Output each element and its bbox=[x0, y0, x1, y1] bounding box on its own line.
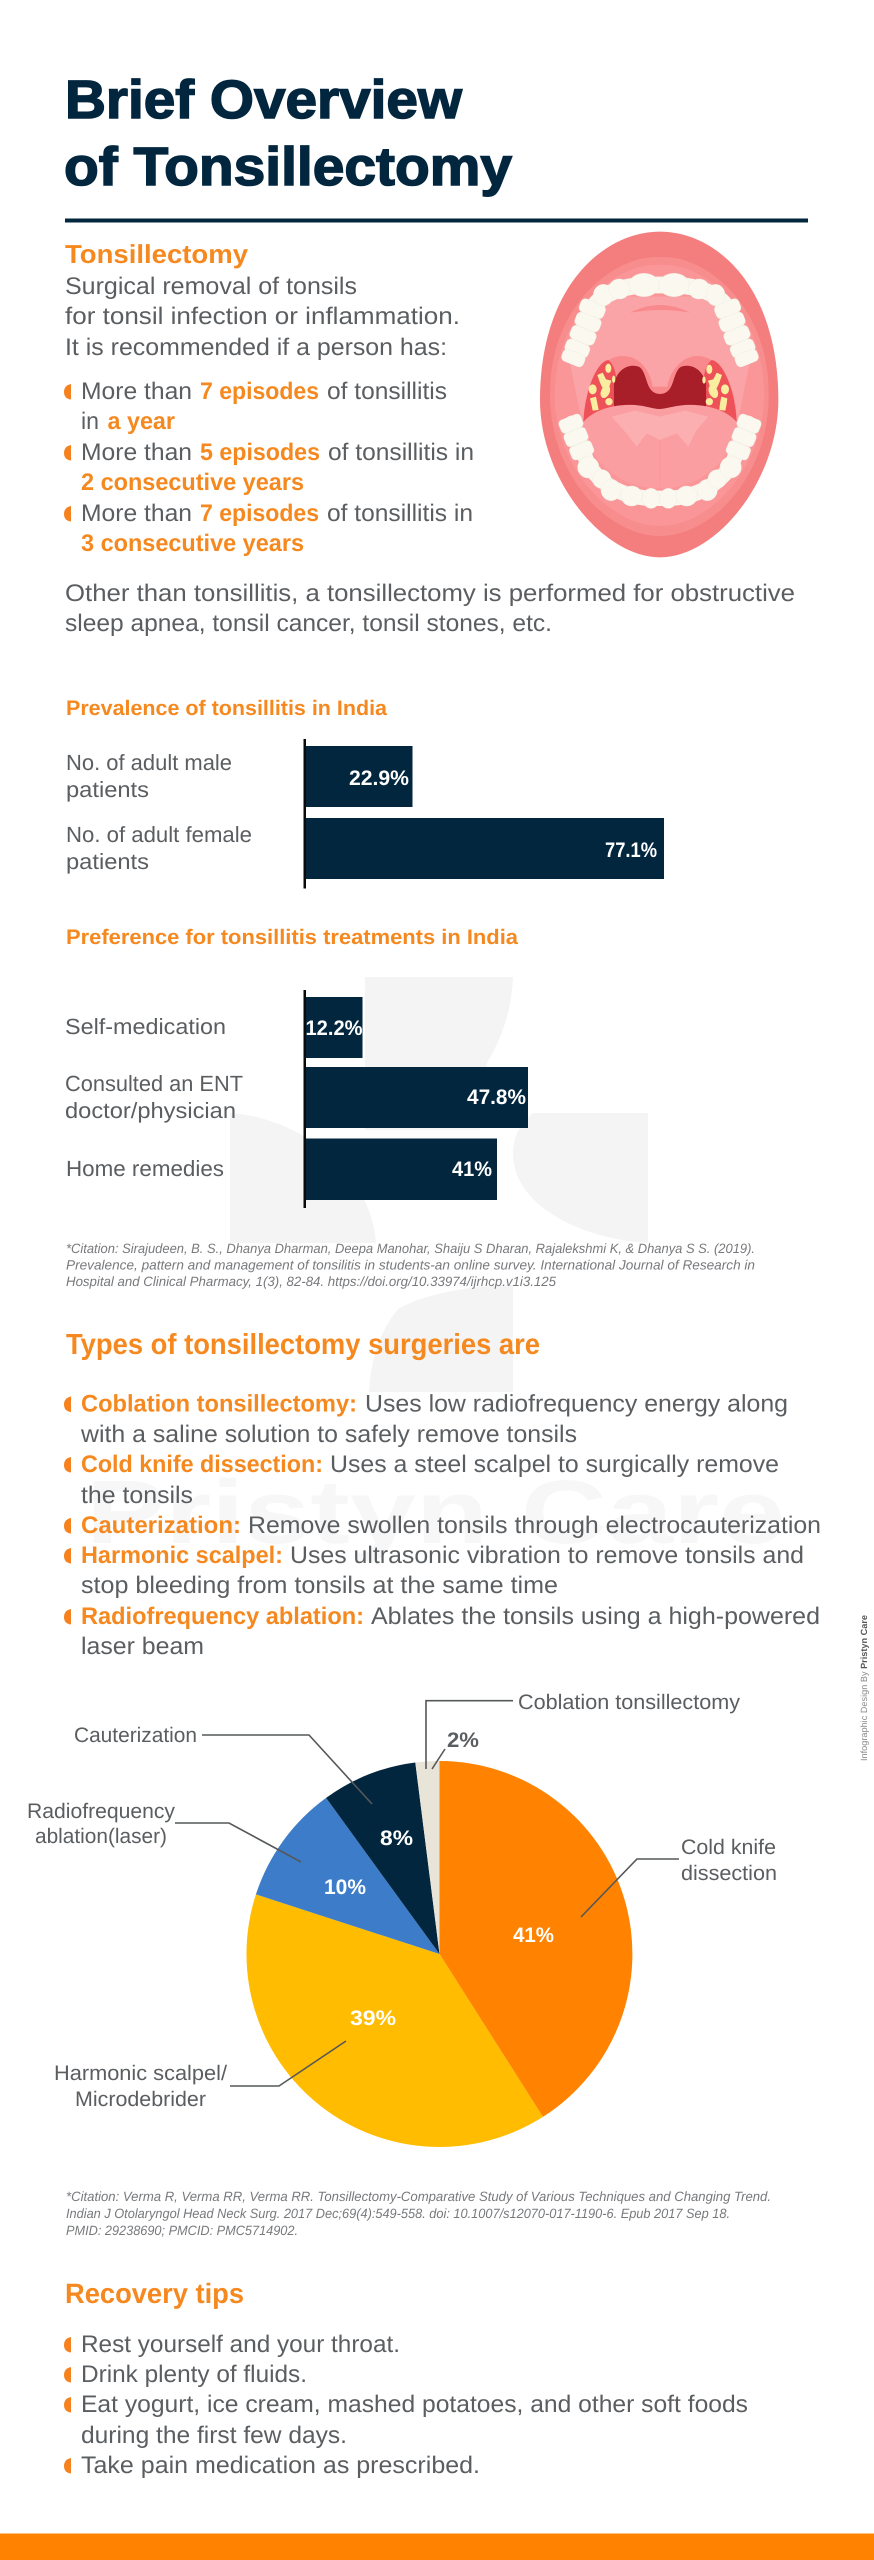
slice: radiofrequency 10% bbox=[256, 1798, 440, 1954]
bar label: male patients: No. of adult male bbox=[66, 750, 232, 775]
bar label: male patients: patients bbox=[66, 777, 149, 802]
background watermark logo bbox=[230, 977, 648, 1392]
citation: technique study: *Citation: Verma R, Verma RR, Verma RR. Tonsillectomy-Comparative Study of Various Techniques and Changing Trend. bbox=[66, 2189, 771, 2204]
citation: technique study: PMID: 29238690; PMCID: PMC5714902. bbox=[66, 2223, 298, 2238]
bar label: female patients: No. of adult female bbox=[66, 822, 252, 847]
list: surgery types: Harmonic scalpel: bbox=[81, 1542, 283, 1569]
list: recovery tips: Take pain medication as prescribed. bbox=[81, 2452, 480, 2479]
bar: 41%: 41% bbox=[452, 1158, 492, 1181]
text block: definition: Surgical removal of tonsils bbox=[65, 273, 357, 300]
citation: prevalence study: *Citation: Sirajudeen, B. S., Dhanya Dharman, Deepa Manohar, Shaiju S Dharan, Rajalekshmi K, & Dhanya S S. (2019). bbox=[66, 1241, 755, 1256]
list: recovery tips bbox=[64, 2331, 748, 2479]
list: recovery tips: Drink plenty of fluids. bbox=[81, 2361, 307, 2388]
heading: tonsillectomy: Tonsillectomy bbox=[65, 239, 249, 269]
list: criteria for surgery: of tonsillitis in bbox=[327, 500, 473, 527]
pie labels: dissection bbox=[681, 1862, 777, 1885]
list: surgery types: Uses low radiofrequency energy along bbox=[365, 1390, 788, 1418]
pie chart: surgery technique share bbox=[27, 1691, 777, 2147]
footer band bbox=[0, 2534, 874, 2560]
heading: surgery types: Types of tonsillectomy surgeries are bbox=[66, 1329, 540, 1361]
title bbox=[64, 70, 512, 197]
heading: prevalence: Prevalence of tonsillitis in India bbox=[66, 697, 387, 720]
list: surgery types: Coblation tonsillectomy: bbox=[81, 1390, 357, 1418]
bar: 77.1% bbox=[306, 818, 664, 879]
pie values: 8% bbox=[380, 1827, 413, 1850]
list: criteria for surgery: 3 consecutive years bbox=[81, 530, 304, 557]
pie labels: Harmonic scalpel/ bbox=[54, 2062, 227, 2085]
citation: prevalence study: Prevalence, pattern and management of tonsilitis in students-an online survey. International Journal of Research in bbox=[66, 1258, 755, 1272]
bar chart: treatment preference bbox=[65, 990, 528, 1208]
bar label: female patients bbox=[66, 822, 252, 874]
panel: tonsillectomy definition bbox=[64, 239, 795, 637]
pie values: 10% bbox=[324, 1876, 366, 1899]
bar: 22.9%: 22.9% bbox=[349, 767, 409, 790]
bar label: ENT doctor: Consulted an ENT bbox=[65, 1071, 243, 1096]
pie labels: Coblation tonsillectomy bbox=[518, 1691, 741, 1714]
list: surgery types: Ablates the tonsils using a high-powered bbox=[371, 1603, 820, 1630]
bar: 12.2% bbox=[306, 997, 363, 1058]
icon: open mouth with infected tonsils bbox=[540, 232, 778, 557]
list: criteria for surgery: a year bbox=[108, 408, 175, 435]
citation: technique study bbox=[66, 2189, 771, 2238]
title: of Tonsillectomy bbox=[64, 137, 512, 197]
side credit: Infographic Design By Pristyn Care bbox=[859, 1615, 869, 1761]
pie labels: Radiofrequency bbox=[27, 1800, 176, 1823]
background watermark wordmark: Pristyn Care bbox=[86, 1463, 785, 1563]
bar label: ENT doctor bbox=[65, 1071, 243, 1123]
bar: 47.8% bbox=[306, 1067, 528, 1128]
bar: 77.1%: 77.1% bbox=[605, 839, 657, 862]
text block: other indications: Other than tonsillitis, a tonsillectomy is performed for obstructive bbox=[65, 580, 795, 607]
list: criteria for surgery bbox=[64, 378, 474, 557]
list: surgery types: the tonsils bbox=[81, 1482, 193, 1509]
slice: harmonic scalpel 39% bbox=[246, 1894, 543, 2147]
list: criteria for surgery: of tonsillitis bbox=[327, 378, 447, 405]
list: criteria for surgery: More than bbox=[81, 378, 192, 405]
pie values bbox=[324, 1729, 554, 2030]
bar label: male patients bbox=[66, 750, 232, 802]
list: criteria for surgery: 7 episodes bbox=[200, 500, 319, 527]
bar: 22.9% bbox=[306, 746, 412, 807]
slice: coblation 2% bbox=[415, 1761, 440, 1954]
bar: 12.2%: 12.2% bbox=[306, 1017, 363, 1040]
list: surgery types: Radiofrequency ablation: bbox=[81, 1603, 364, 1630]
text block: definition bbox=[65, 273, 460, 361]
list: recovery tips: during the first few days. bbox=[81, 2422, 347, 2449]
text block: other indications: sleep apnea, tonsil cancer, tonsil stones, etc. bbox=[65, 610, 552, 637]
bar: 41% bbox=[306, 1138, 497, 1200]
list: surgery types: stop bleeding from tonsils at the same time bbox=[81, 1572, 558, 1599]
list: recovery tips: Eat yogurt, ice cream, mashed potatoes, and other soft foods bbox=[81, 2391, 748, 2418]
pie labels bbox=[27, 1691, 777, 2111]
title: Brief Overview bbox=[65, 70, 463, 130]
list: recovery tips: Rest yourself and your throat. bbox=[81, 2331, 400, 2358]
citation: prevalence study bbox=[66, 1241, 755, 1289]
bar: 47.8%: 47.8% bbox=[467, 1086, 526, 1109]
bar label: home remedies: Home remedies bbox=[66, 1156, 224, 1181]
list: criteria for surgery: in bbox=[81, 408, 99, 435]
pie values: 39% bbox=[350, 2007, 396, 2030]
list: surgery types: with a saline solution to safely remove tonsils bbox=[80, 1421, 577, 1448]
bar label: female patients: patients bbox=[66, 849, 149, 874]
pie labels: Cauterization bbox=[74, 1724, 197, 1747]
text block: other indications bbox=[65, 580, 795, 637]
slice: cold knife 41% bbox=[440, 1761, 632, 2117]
list: surgery types bbox=[64, 1390, 821, 1660]
pie values: 41% bbox=[513, 1924, 554, 1947]
leader lines bbox=[175, 1701, 679, 2086]
list: criteria for surgery: More than bbox=[81, 500, 192, 527]
pie labels: Cold knife bbox=[681, 1836, 776, 1859]
slice: cauterization 8% bbox=[326, 1762, 440, 1954]
bar label: ENT doctor: doctor/physician bbox=[65, 1098, 236, 1123]
pie labels: Microdebrider bbox=[75, 2088, 206, 2111]
list: criteria for surgery: More than bbox=[81, 439, 192, 466]
list: criteria for surgery: of tonsillitis in bbox=[328, 439, 474, 466]
heading: treatment preference: Preference for tonsillitis treatments in India bbox=[66, 926, 518, 949]
text block: definition: It is recommended if a person has: bbox=[65, 334, 447, 361]
list: surgery types: Uses ultrasonic vibration to remove tonsils and bbox=[290, 1542, 804, 1569]
list: surgery types: laser beam bbox=[81, 1633, 204, 1660]
bar chart: prevalence of tonsillitis bbox=[66, 739, 664, 888]
pie values: 2% bbox=[447, 1729, 479, 1752]
list: criteria for surgery: 5 episodes bbox=[200, 439, 320, 466]
bar label: self-medication: Self-medication bbox=[65, 1014, 226, 1039]
list: surgery types: Cauterization: bbox=[81, 1512, 241, 1539]
citation: prevalence study: Hospital and Clinical Pharmacy, 1(3), 82-84. https://doi.org/10.33974/ijrhcp.v1i3.125 bbox=[66, 1274, 556, 1289]
heading: recovery tips: Recovery tips bbox=[65, 2278, 244, 2309]
text block: definition: for tonsil infection or inflammation. bbox=[65, 303, 460, 330]
list: criteria for surgery: 7 episodes bbox=[200, 378, 319, 405]
citation: technique study: Indian J Otolaryngol Head Neck Surg. 2017 Dec;69(4):549-558. doi: 10.1007/s12070-017-1190-6. Epub 2017 Sep 18. bbox=[66, 2206, 730, 2221]
list: surgery types: Uses a steel scalpel to surgically remove bbox=[330, 1451, 779, 1478]
pie labels: ablation(laser) bbox=[35, 1825, 167, 1848]
list: surgery types: Cold knife dissection: bbox=[81, 1451, 323, 1478]
list: criteria for surgery: 2 consecutive years bbox=[81, 469, 304, 496]
list: surgery types: Remove swollen tonsils through electrocauterization bbox=[248, 1512, 821, 1539]
